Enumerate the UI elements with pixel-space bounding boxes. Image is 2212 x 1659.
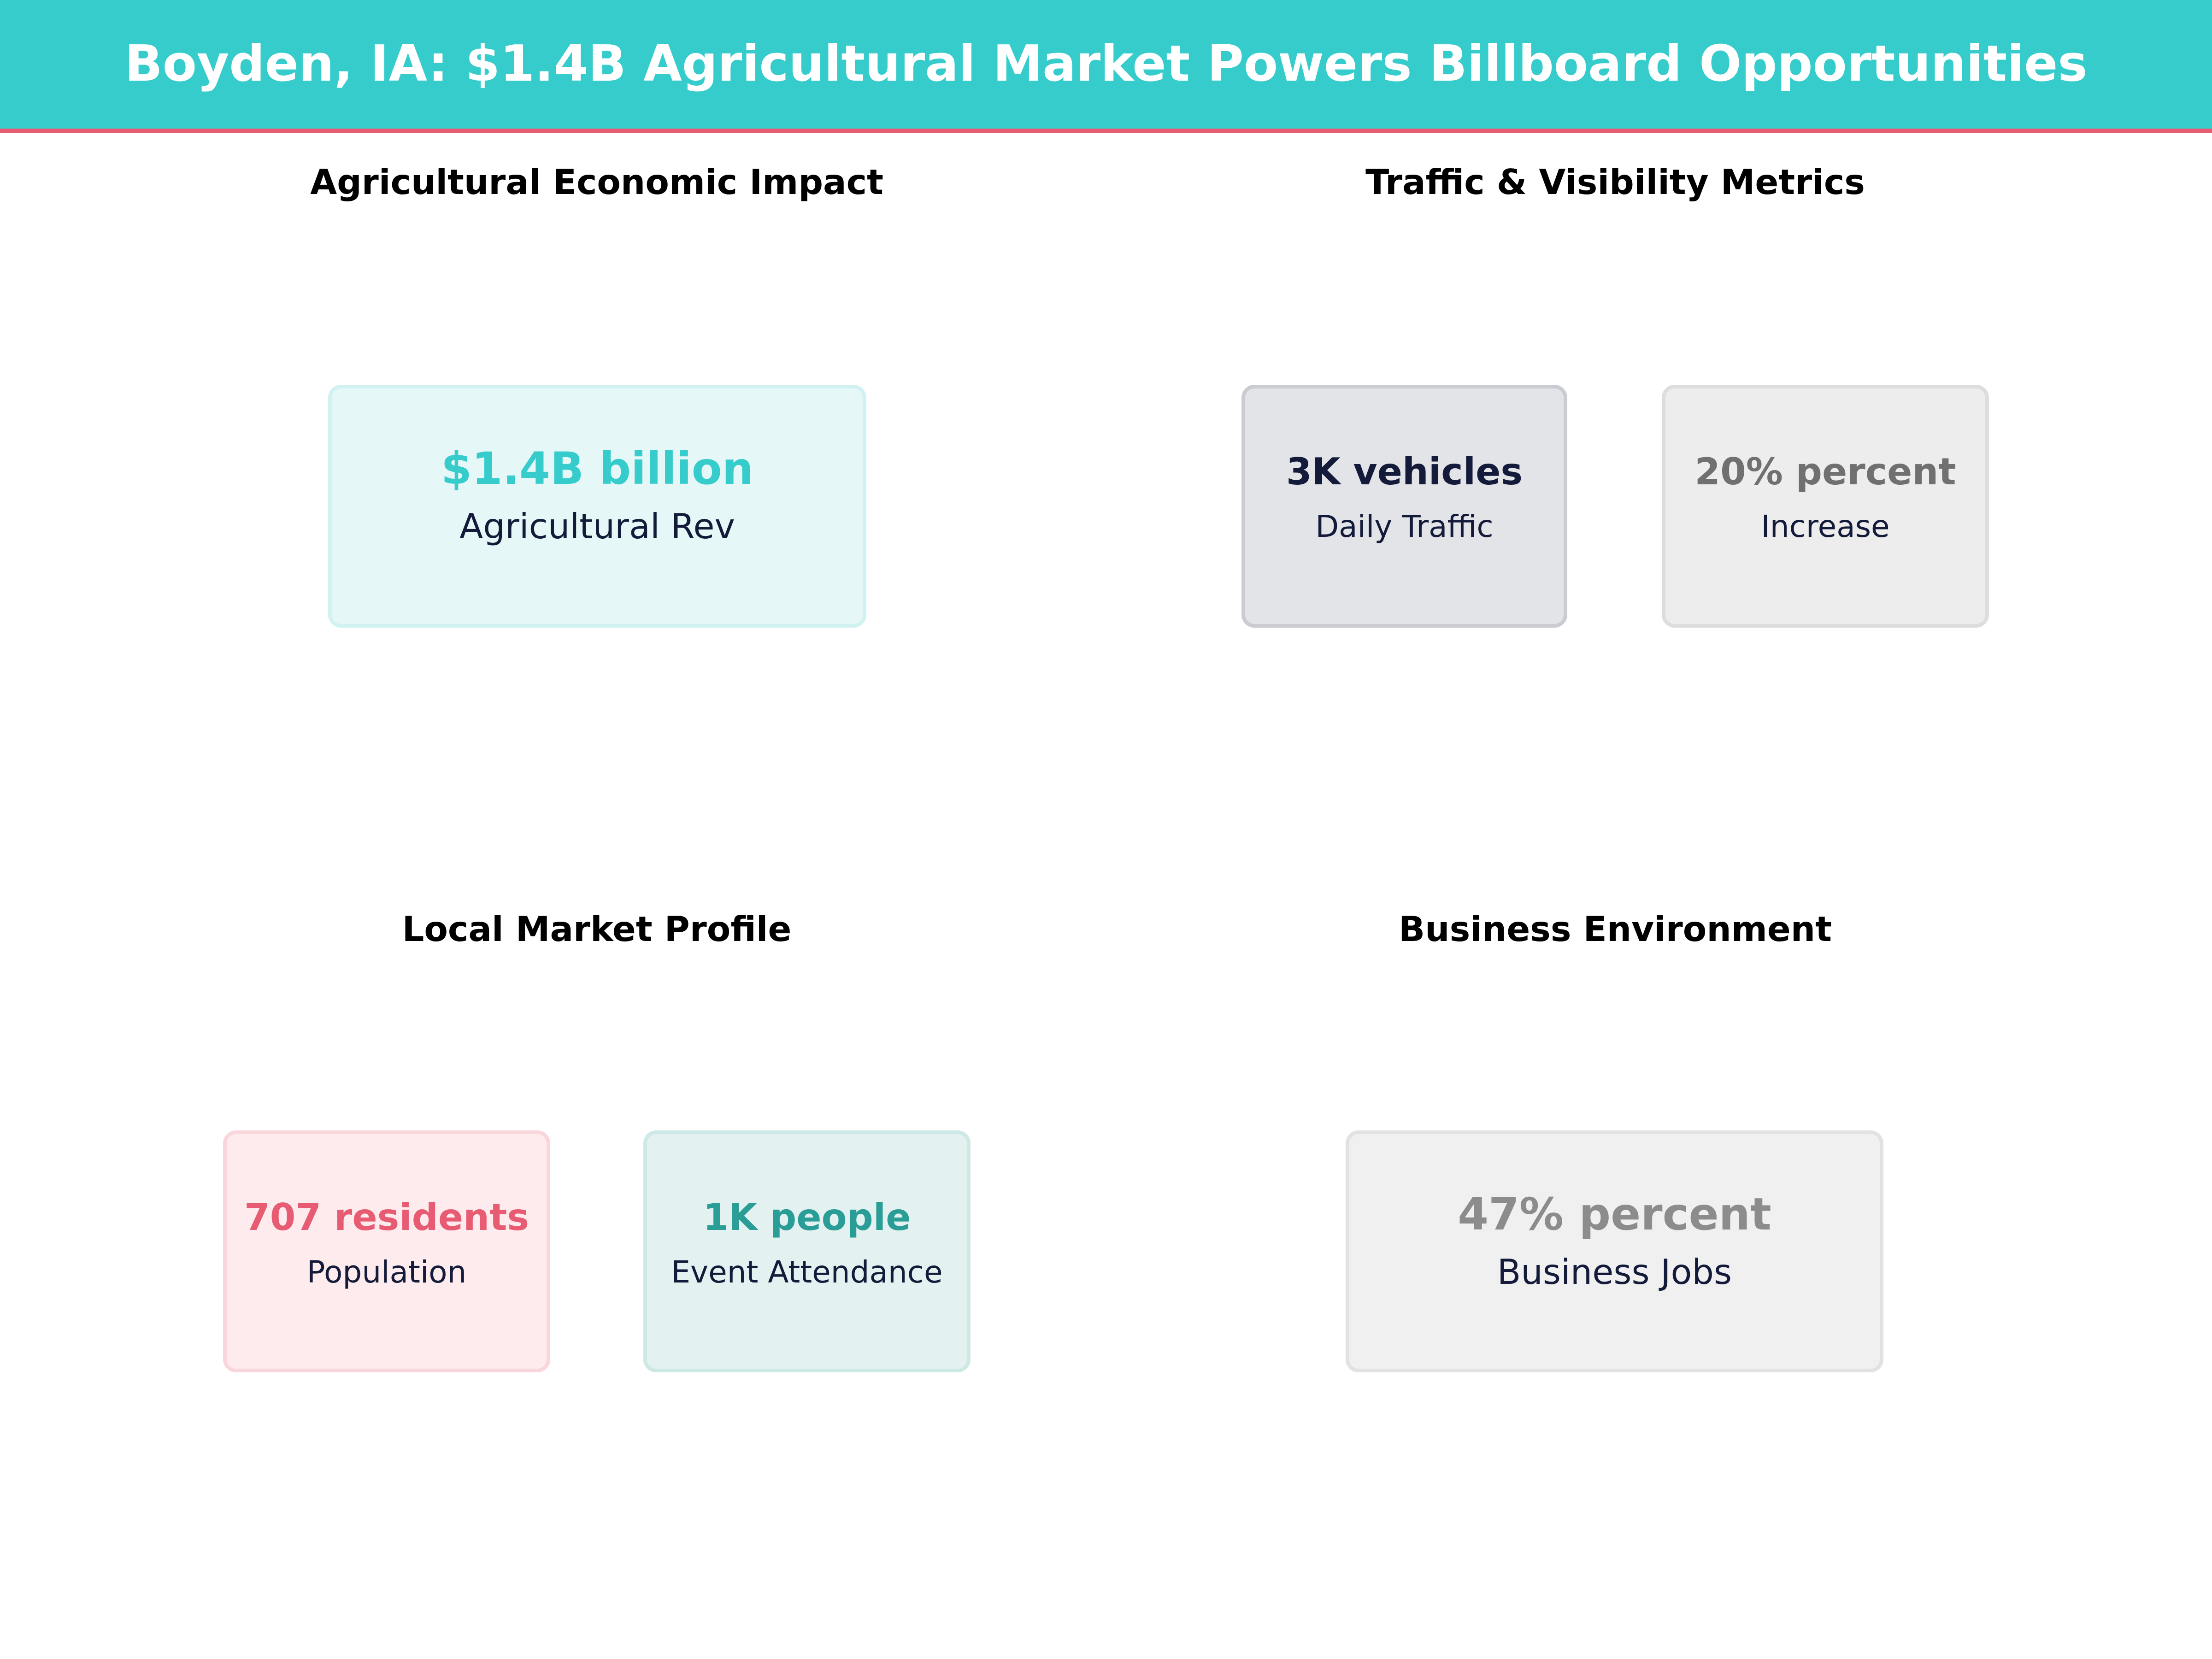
card: business jobs: 47% percent (1458, 1188, 1771, 1240)
card: increase: Increase (1761, 509, 1890, 544)
card: event attendance (643, 1130, 971, 1372)
heading: Traffic & Visibility Metrics: Traffic & Visibility Metrics (1365, 162, 1865, 202)
header banner (0, 0, 2212, 133)
card: agricultural revenue: Agricultural Rev (459, 506, 735, 547)
card: increase (1662, 385, 1989, 628)
card: increase: 20% percent (1694, 450, 1956, 493)
card: population: 707 residents (244, 1196, 529, 1239)
card: business jobs (1346, 1130, 1883, 1372)
card: event attendance: 1K people (703, 1196, 911, 1239)
card: population: Population (307, 1254, 466, 1290)
card: event attendance: Event Attendance (671, 1254, 943, 1290)
card: daily traffic (1241, 385, 1567, 628)
heading: Business Environment: Business Environment (1399, 909, 1832, 949)
title: Boyden, IA: $1.4B Agricultural Market Powers Billboard Opportunities (124, 35, 2088, 93)
heading: Agricultural Economic Impact: Agricultural Economic Impact (310, 162, 883, 202)
card: daily traffic: Daily Traffic (1315, 509, 1494, 544)
heading: Local Market Profile: Local Market Profile (402, 909, 791, 949)
card: agricultural revenue (328, 385, 866, 628)
card: business jobs: Business Jobs (1497, 1252, 1732, 1292)
card: agricultural revenue: $1.4B billion (441, 443, 753, 494)
card: population (223, 1130, 550, 1372)
card: daily traffic: 3K vehicles (1286, 450, 1523, 493)
